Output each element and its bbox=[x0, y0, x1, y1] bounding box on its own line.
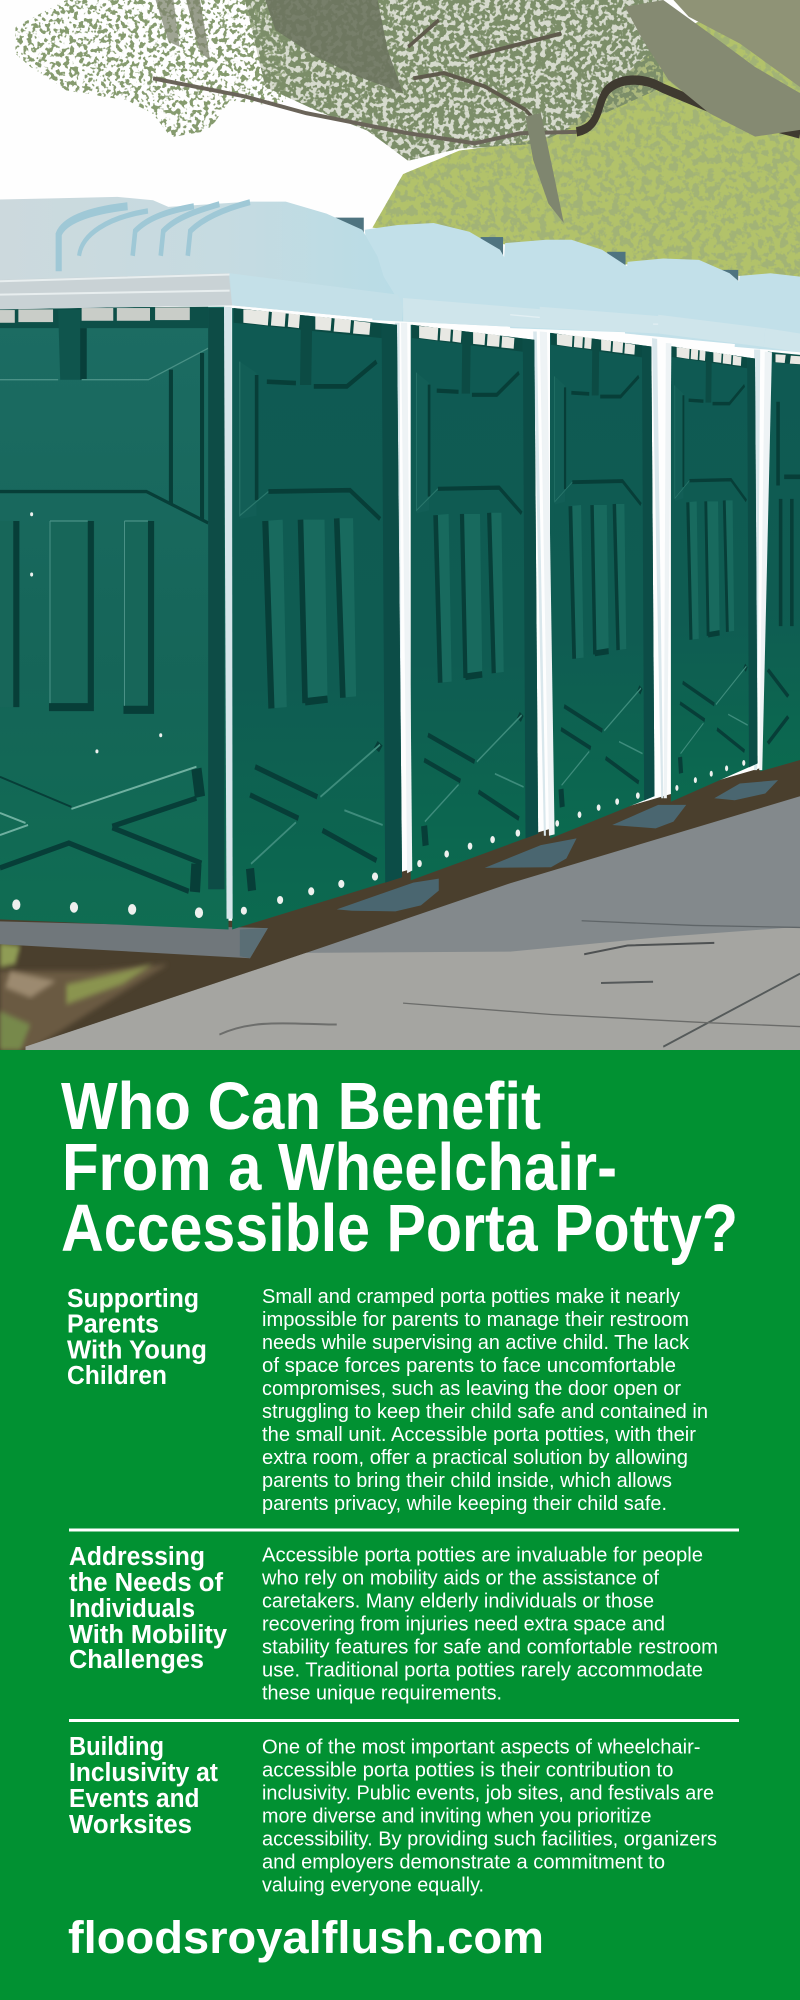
body text: supporting parents: needs while supervising an active child. The lack bbox=[262, 1332, 690, 1354]
body text: supporting parents: struggling to keep their child safe and contained in bbox=[262, 1401, 708, 1423]
unit 5 bbox=[754, 350, 800, 771]
tree canopy and branches bbox=[0, 0, 800, 223]
body text: supporting parents: the small unit. Accessible porta potties, with their bbox=[262, 1424, 696, 1446]
unit 4 bbox=[652, 338, 758, 802]
body text: supporting parents: of space forces parents to face uncomfortable bbox=[262, 1355, 676, 1377]
heading: building inclusivity: Building bbox=[69, 1733, 164, 1761]
heading: mobility challenges: Challenges bbox=[69, 1646, 204, 1674]
footer: website url: floodsroyalflush.com bbox=[68, 1912, 544, 1963]
body text: mobility challenges: caretakers. Many elderly individuals or those bbox=[262, 1590, 654, 1612]
hanging moss bbox=[156, 0, 800, 223]
heading: building inclusivity: Events and bbox=[69, 1785, 200, 1813]
section: supporting parents bbox=[67, 1285, 708, 1515]
body text: building inclusivity: valuing everyone equally. bbox=[262, 1874, 484, 1896]
body text: building inclusivity: accessible porta potties is their contribution to bbox=[262, 1760, 674, 1782]
heading: mobility challenges: Individuals bbox=[69, 1595, 195, 1623]
body text: mobility challenges: who rely on mobility aids or the assistance of bbox=[261, 1568, 659, 1590]
body text: supporting parents: Small and cramped porta potties make it nearly bbox=[262, 1286, 680, 1308]
heading: mobility challenges bbox=[69, 1543, 228, 1674]
body text: supporting parents: parents privacy, while keeping their child safe. bbox=[262, 1493, 667, 1515]
panel: green content background bbox=[0, 1050, 800, 2000]
body text: mobility challenges: Accessible porta potties are invaluable for people bbox=[262, 1544, 703, 1566]
body text: supporting parents: extra room, offer a practical solution by allowing bbox=[262, 1447, 688, 1469]
body text: building inclusivity: inclusivity. Public events, job sites, and festivals are bbox=[262, 1782, 714, 1804]
heading: supporting parents: Supporting bbox=[67, 1285, 199, 1313]
unit 2 bbox=[395, 323, 538, 880]
unit 1 front face bbox=[0, 307, 233, 929]
body text: building inclusivity bbox=[262, 1736, 717, 1896]
ground: mulch and sidewalk bbox=[0, 757, 800, 1050]
body text: mobility challenges bbox=[261, 1544, 718, 1704]
title: From a Wheelchair- bbox=[62, 1130, 617, 1205]
body text: supporting parents: impossible for parents to manage their restroom bbox=[262, 1309, 689, 1331]
body text: building inclusivity: more diverse and inviting when you prioritize bbox=[262, 1806, 652, 1828]
body text: supporting parents bbox=[262, 1286, 708, 1515]
heading: mobility challenges: the Needs of bbox=[69, 1569, 224, 1597]
bases and feet bbox=[0, 780, 778, 958]
body text: supporting parents: compromises, such as leaving the door open or bbox=[262, 1378, 681, 1400]
photo: row of green portable toilets bbox=[0, 0, 800, 1050]
heading: supporting parents: With Young bbox=[67, 1336, 207, 1364]
body text: mobility challenges: recovering from injuries need extra space and bbox=[262, 1614, 665, 1636]
heading: building inclusivity: Inclusivity at bbox=[69, 1759, 218, 1787]
title bbox=[61, 1069, 738, 1266]
heading: mobility challenges: Addressing bbox=[69, 1543, 205, 1571]
body text: building inclusivity: accessibility. By providing such facilities, organizers bbox=[262, 1828, 717, 1850]
body text: building inclusivity: One of the most important aspects of wheelchair- bbox=[262, 1736, 700, 1758]
body text: mobility challenges: use. Traditional porta potties rarely accommodate bbox=[262, 1660, 703, 1682]
background tree foliage bbox=[372, 22, 800, 277]
heading: supporting parents bbox=[67, 1285, 207, 1390]
section: mobility challenges bbox=[69, 1543, 718, 1704]
section: building inclusivity bbox=[69, 1733, 717, 1896]
unit 1 side face bbox=[232, 308, 402, 929]
heading: mobility challenges: With Mobility bbox=[69, 1621, 228, 1649]
heading: building inclusivity bbox=[69, 1733, 218, 1839]
body text: mobility challenges: these unique requirements. bbox=[262, 1682, 502, 1704]
heading: supporting parents: Children bbox=[67, 1362, 167, 1390]
title: Who Can Benefit bbox=[61, 1069, 541, 1144]
unit 3 bbox=[533, 331, 654, 839]
body text: building inclusivity: and employers demonstrate a commitment to bbox=[262, 1852, 665, 1874]
body text: mobility challenges: stability features for safe and comfortable restroom bbox=[262, 1636, 718, 1658]
body text: supporting parents: parents to bring their child inside, which allows bbox=[262, 1470, 672, 1492]
heading: supporting parents: Parents bbox=[67, 1310, 159, 1338]
roofs bbox=[0, 197, 800, 352]
heading: building inclusivity: Worksites bbox=[69, 1811, 192, 1839]
